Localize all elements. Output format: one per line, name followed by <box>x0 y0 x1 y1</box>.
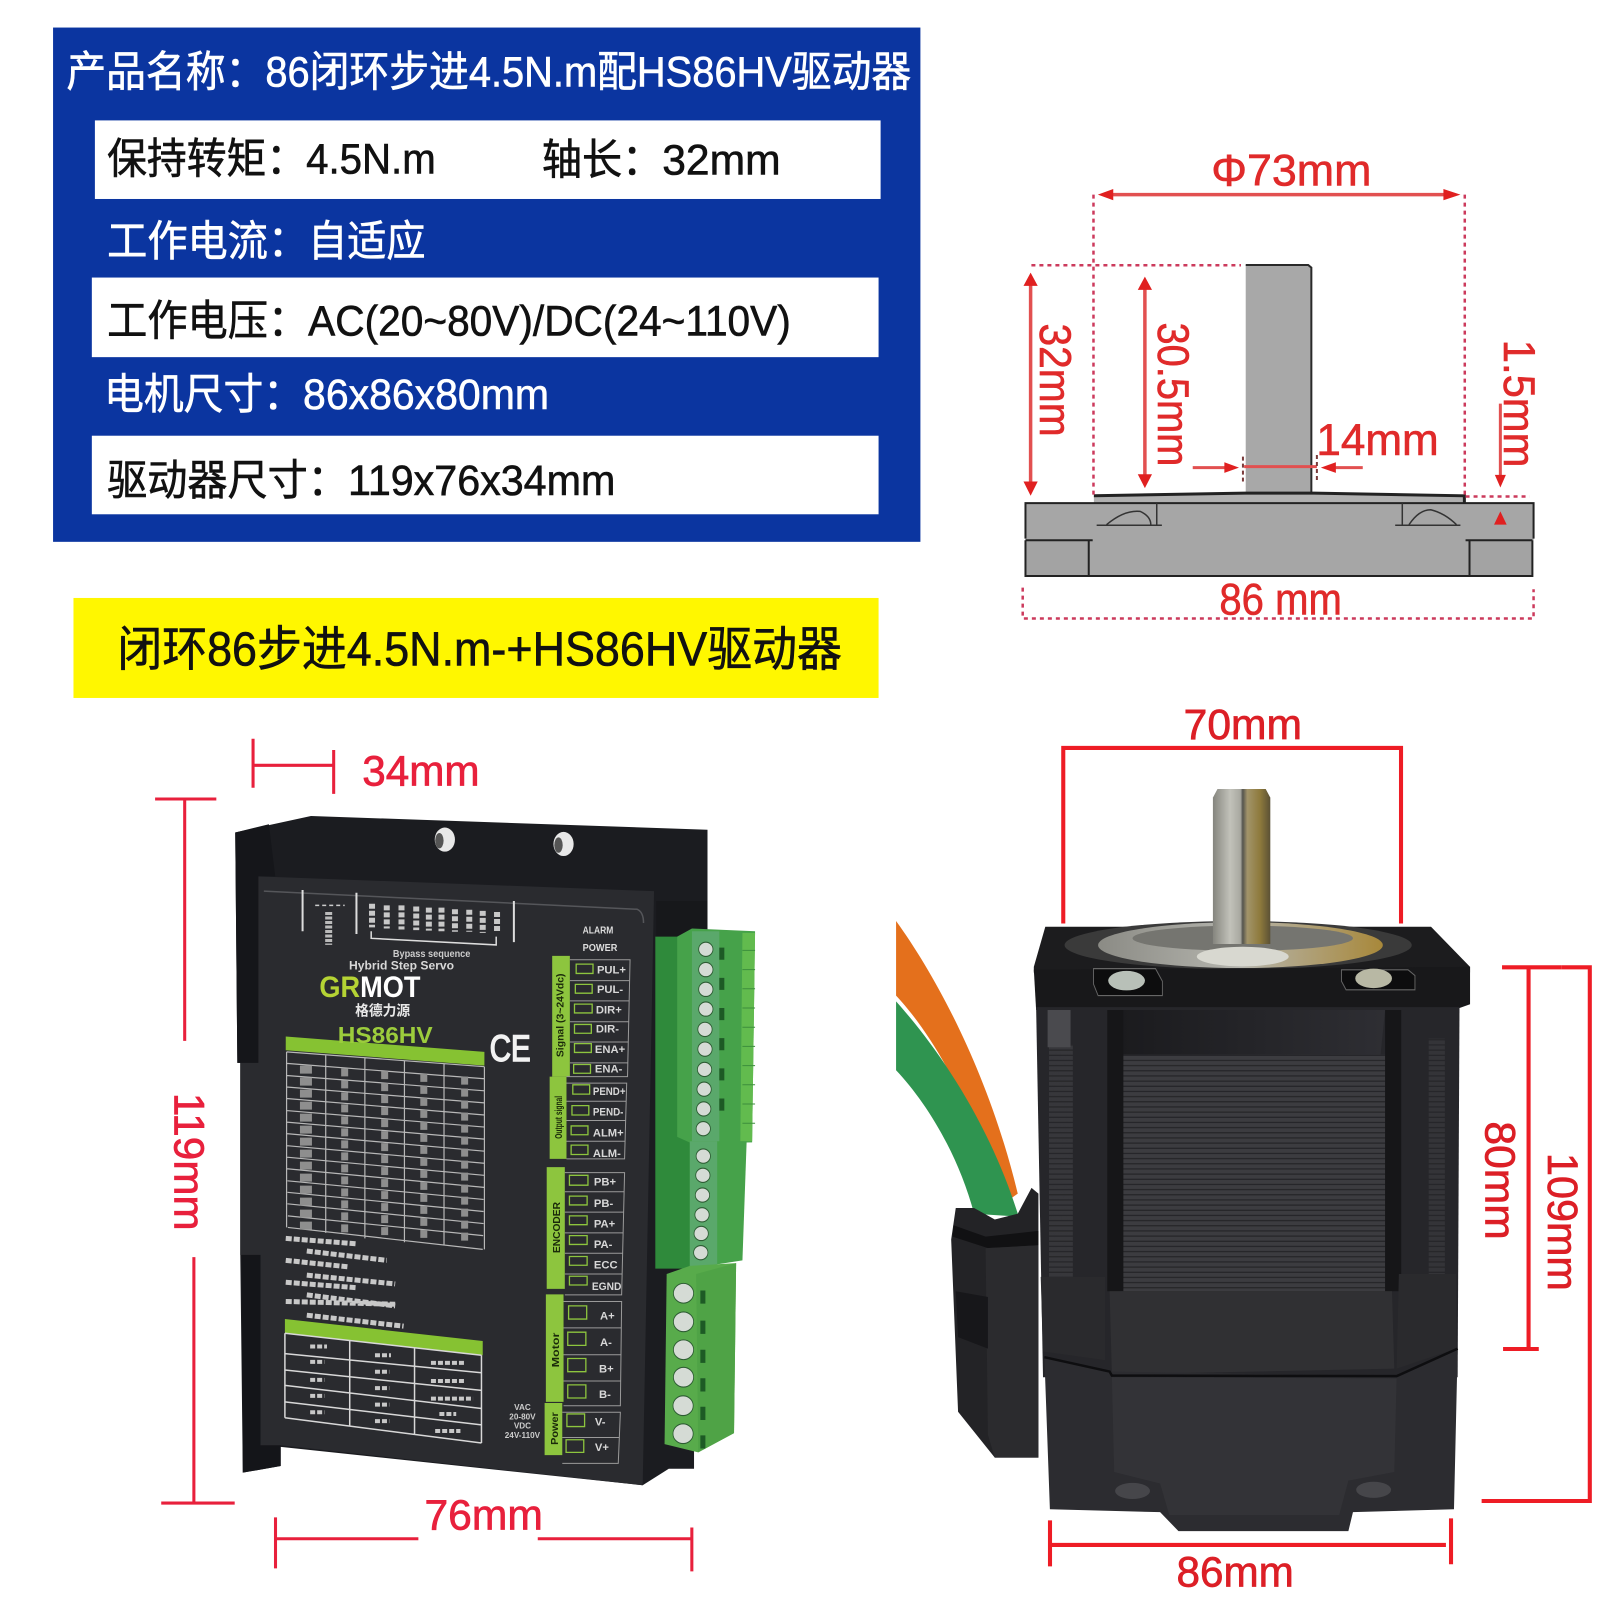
row: working voltage <box>92 278 879 357</box>
dimension: 76mm: 76mm <box>424 1492 543 1540</box>
text: terminal labels: V+ <box>595 1442 609 1454</box>
diagram: motor shaft dimension drawing <box>1023 145 1545 624</box>
arrows: 1.5mm step <box>1494 404 1507 525</box>
dimension: 119mm <box>155 799 235 1503</box>
row: driver size: 119x76x34mm <box>348 457 615 505</box>
text: driver model labels: GRMOT <box>319 971 420 1004</box>
text: terminal labels: ALM+ <box>593 1128 624 1140</box>
text: terminal labels: PEND+ <box>593 1086 626 1098</box>
text: driver model labels: 格德力源 <box>355 1001 411 1019</box>
row: driver size: 驱动器尺寸： <box>107 457 348 505</box>
text: terminal labels: A+ <box>600 1310 615 1322</box>
arrow: 73mm width <box>1098 189 1460 200</box>
text: driver model labels: 24V-110V <box>505 1431 541 1440</box>
text: terminal labels: ALM- <box>593 1148 621 1160</box>
text: terminal labels: PUL+ <box>597 964 626 976</box>
text: terminal labels: PUL- <box>597 984 623 996</box>
arrow: 32mm height <box>1023 273 1038 496</box>
text: terminal labels: EGND <box>592 1281 621 1293</box>
text: terminal labels: Output signal <box>554 1096 565 1139</box>
text: 1.5mm: 1.5mm <box>1494 340 1545 467</box>
row: holding torque and shaft length <box>95 120 881 199</box>
text: terminal labels: ENA- <box>595 1063 623 1075</box>
text: terminal labels: B- <box>599 1389 611 1401</box>
motor shaft <box>1213 789 1270 944</box>
signal terminal panel <box>545 956 630 1463</box>
dimension: 86mm: 86mm <box>1177 1549 1294 1597</box>
row: holding torque and shaft length: 4.5N.m <box>306 135 436 183</box>
dotted extension lines <box>1023 195 1534 618</box>
text: terminal labels: B+ <box>599 1363 614 1375</box>
connector <box>951 1188 1038 1458</box>
row: holding torque and shaft length: 轴长： <box>542 136 662 184</box>
text: terminal labels: PA+ <box>594 1219 616 1231</box>
text: driver model labels: CE <box>490 1028 531 1069</box>
text: driver model labels <box>319 926 618 1440</box>
text: driver model labels: ALARM <box>583 926 613 937</box>
text: 30.5mm: 30.5mm <box>1148 322 1199 466</box>
banner: yellow product title <box>73 598 879 698</box>
text: terminal labels: PB- <box>594 1198 613 1210</box>
dimension: 70mm: 70mm <box>1184 701 1302 749</box>
dimension: 86mm <box>1050 1518 1451 1597</box>
banner: yellow product title: 闭环86步进4.5N.m-+HS86HV驱动器 <box>117 623 842 676</box>
panel: product specifications <box>53 28 920 542</box>
text: driver model labels: 20-80V <box>509 1412 536 1421</box>
encoder housing <box>1044 1349 1458 1531</box>
dimension: 34mm: 34mm <box>362 748 480 796</box>
text: driver model labels: VAC <box>514 1403 531 1412</box>
text: 14mm: 14mm <box>1316 414 1439 465</box>
text: driver model labels: Hybrid Step Servo <box>349 958 454 972</box>
row: working current: 工作电流： <box>107 218 308 266</box>
text: terminal labels: PA- <box>594 1239 613 1251</box>
heading: product name: 产品名称：86闭环步进4.5N.m配HS86HV驱动器 <box>66 49 911 97</box>
text: terminal labels: PEND- <box>593 1106 624 1118</box>
text: terminal labels: A- <box>600 1337 612 1349</box>
mounting screws <box>1094 969 1415 996</box>
dimension: 70mm <box>1063 701 1401 923</box>
text: terminal labels <box>550 964 626 1454</box>
row: holding torque and shaft length: 保持转矩： <box>107 135 306 183</box>
text: terminal labels: PB+ <box>594 1177 616 1189</box>
row: motor size: 电机尺寸： <box>104 371 303 419</box>
text: driver model labels: POWER <box>583 943 618 954</box>
row: working voltage: AC(20~80V)/DC(24~110V) <box>308 298 791 346</box>
table: parameter table <box>286 1037 484 1249</box>
table: current settings table <box>285 1319 483 1443</box>
dimension: 76mm <box>276 1492 692 1571</box>
text: terminal labels: Power <box>550 1412 561 1445</box>
text: driver model labels: HS86HV <box>338 1022 433 1048</box>
text: 86 mm: 86 mm <box>1219 573 1342 624</box>
row: driver size <box>92 436 879 514</box>
text: 32mm: 32mm <box>1030 323 1081 437</box>
dimension: 119mm: 119mm <box>164 1093 212 1231</box>
cables <box>896 921 1019 1217</box>
text: 73mm: Φ73mm <box>1211 145 1371 196</box>
text block: switch settings <box>286 1238 404 1326</box>
motor flange top <box>1034 921 1470 973</box>
text: terminal labels: DIR- <box>596 1024 619 1036</box>
dimension: 80mm <box>1476 967 1561 1349</box>
arrow: 30.5mm height <box>1138 277 1152 488</box>
dimension: 80mm: 80mm <box>1476 1121 1524 1240</box>
text: terminal labels: ENA+ <box>595 1044 626 1056</box>
drawing: flange and shaft side view <box>1025 265 1534 576</box>
dimension: 109mm: 109mm <box>1538 1153 1586 1291</box>
row: motor size: 86x86x80mm <box>303 371 549 419</box>
text: terminal labels: Signal (3~24Vdc) <box>555 973 566 1057</box>
product: HS86HV driver <box>155 739 755 1571</box>
row: working voltage: 工作电压： <box>107 298 308 346</box>
text: terminal labels: DIR+ <box>596 1004 622 1016</box>
text: driver model labels: VDC <box>514 1422 531 1431</box>
text: terminal labels: V- <box>595 1417 606 1429</box>
arrows: 14mm shaft width <box>1193 455 1363 482</box>
product: stepper motor <box>896 701 1592 1597</box>
text: terminal labels: Motor <box>551 1332 562 1367</box>
row: holding torque and shaft length: 32mm <box>662 136 781 184</box>
row: motor size <box>104 371 549 419</box>
row: working current <box>107 218 426 266</box>
dimension: 109mm <box>1482 967 1592 1501</box>
green screw terminals <box>655 928 755 1452</box>
driver case <box>235 816 708 1485</box>
text: terminal labels: ECC <box>594 1259 618 1271</box>
row: working current: 自适应 <box>308 218 426 266</box>
dimension: 34mm <box>253 739 480 796</box>
text: driver model labels: Bypass sequence <box>393 949 471 960</box>
text: terminal labels: ENCODER <box>552 1202 563 1253</box>
motor housing <box>1034 967 1470 1377</box>
